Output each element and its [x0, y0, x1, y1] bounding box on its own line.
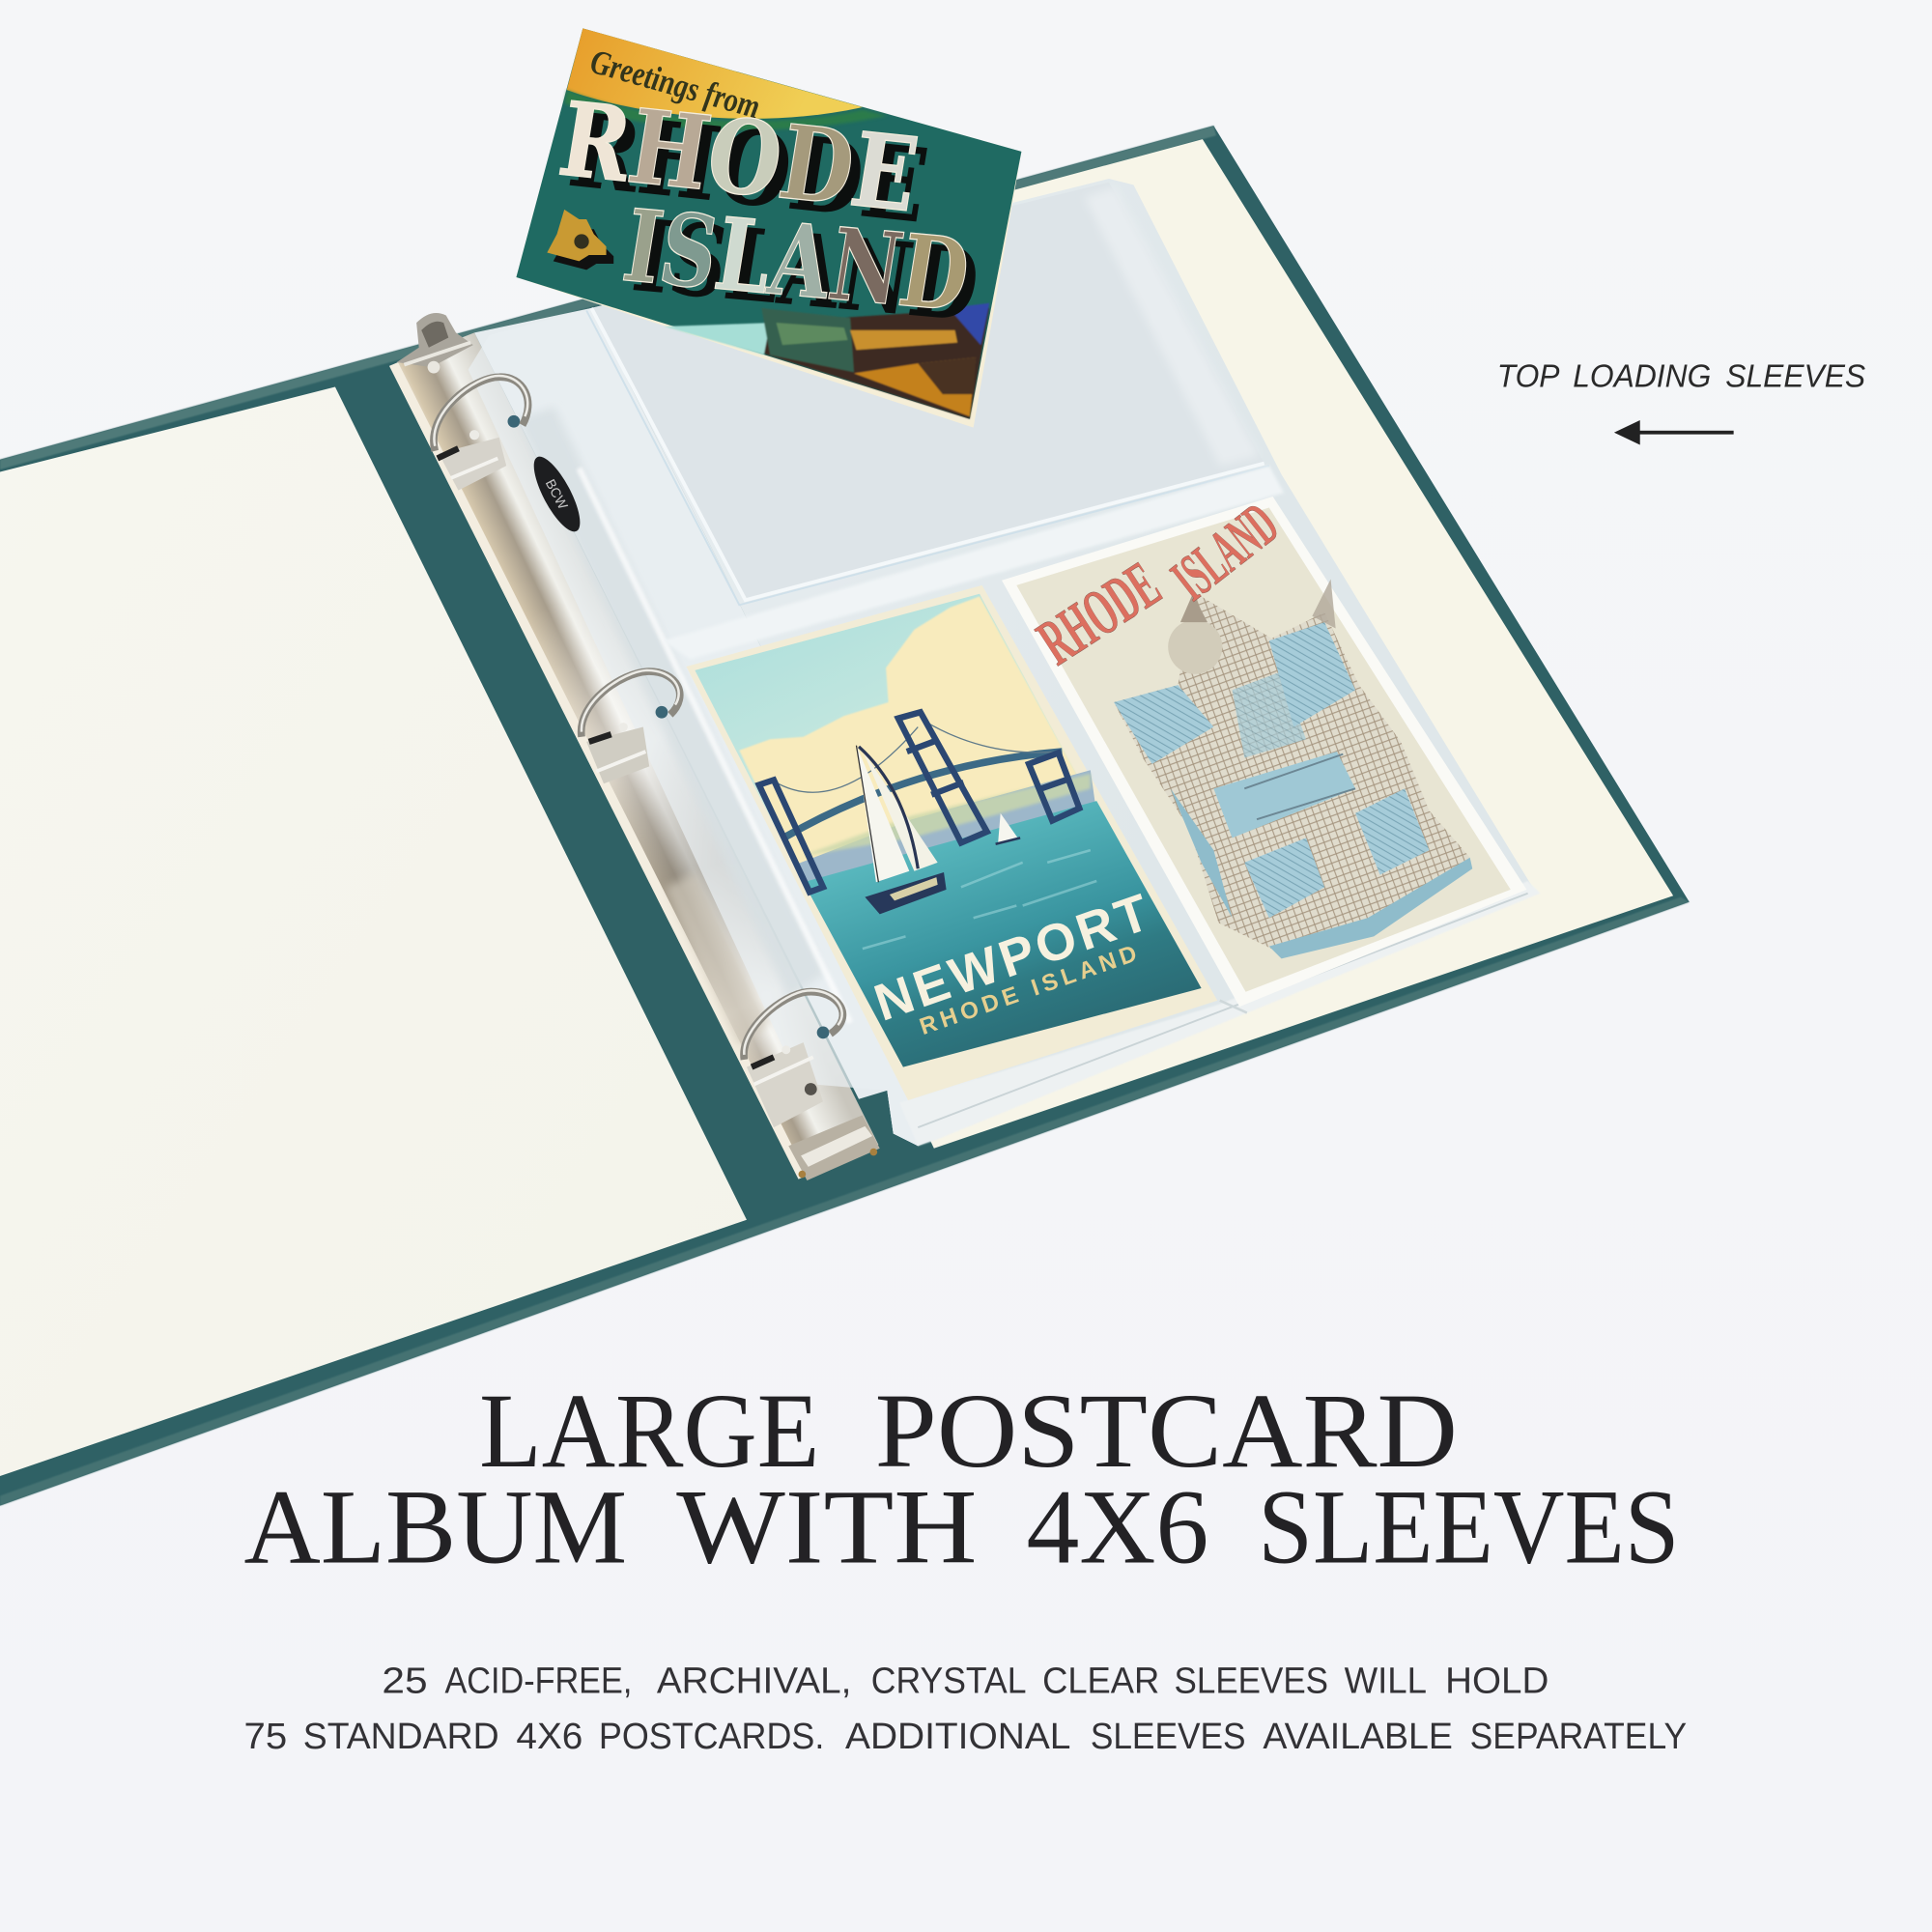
title: SLEEVES	[1258, 1467, 1680, 1585]
description text: 25	[382, 1661, 428, 1702]
city illustration	[1114, 579, 1472, 958]
description text: SLEEVES	[1175, 1661, 1328, 1702]
BCW label	[526, 451, 588, 537]
description text: 75	[244, 1716, 287, 1757]
ring 3	[744, 990, 842, 1127]
binder ring metal bar	[389, 313, 880, 1180]
clouds	[739, 596, 1091, 865]
description text: SLEEVES	[1091, 1716, 1246, 1757]
title: Rhode Island: ISLAND	[1159, 490, 1291, 613]
text: Newport: NEWPORT	[867, 883, 1156, 1033]
left inner page	[0, 387, 747, 1476]
description text: 4X6	[516, 1716, 582, 1757]
street scene	[665, 303, 989, 419]
ring 2	[582, 670, 680, 783]
distant hills	[795, 770, 1096, 894]
description text: AVAILABLE	[1263, 1716, 1453, 1757]
sailboat	[856, 746, 947, 914]
title: WITH	[676, 1467, 977, 1585]
description text: CRYSTAL	[871, 1661, 1026, 1702]
title: ALBUM	[244, 1467, 627, 1585]
postcard: Greetings from Rhode Island	[516, 28, 1021, 428]
water	[804, 801, 1202, 1067]
letters: Rhode: RHODE	[552, 79, 925, 235]
sky	[695, 594, 1091, 865]
binder cover	[0, 126, 1690, 1506]
description text	[244, 1661, 1687, 1757]
description text: WILL	[1345, 1661, 1427, 1702]
bottom clamp	[788, 1115, 880, 1180]
description text: SEPARATELY	[1470, 1716, 1687, 1757]
letters: Island: ISLAND	[616, 187, 977, 334]
greeting text: Greetings from	[587, 42, 763, 127]
title: 4X6	[1026, 1467, 1208, 1585]
description text: STANDARD	[303, 1716, 499, 1757]
plastic sleeve page	[469, 179, 1540, 1146]
description text: CLEAR	[1042, 1661, 1159, 1702]
right inner page	[739, 139, 1673, 1149]
lower stack edge	[899, 881, 1540, 1146]
description text: ADDITIONAL	[845, 1716, 1070, 1757]
hole strip along the rings	[469, 308, 985, 1146]
upper pocket	[586, 183, 1269, 605]
letters: Island: ISLAND	[626, 198, 987, 344]
small sailboat	[996, 813, 1020, 844]
ring 1	[434, 376, 528, 491]
description text: ARCHIVAL,	[657, 1661, 851, 1702]
description text: POSTCARDS.	[599, 1716, 824, 1757]
description text: ACID-FREE,	[444, 1661, 632, 1702]
binder: open album	[0, 126, 1690, 1506]
postcard: Newport Rhode Island	[686, 585, 1217, 1100]
description text: HOLD	[1445, 1661, 1548, 1702]
top clamp	[397, 313, 473, 373]
arrow: pointing left	[1614, 420, 1734, 444]
letters: Rhode: RHODE	[561, 90, 936, 246]
BCW label: BCW	[543, 476, 572, 512]
text: Rhode Island: RHODE ISLAND	[917, 941, 1140, 1040]
yellow sky	[567, 28, 863, 119]
bridge	[759, 712, 1079, 892]
pocket divider	[663, 466, 1284, 659]
binder rings	[434, 376, 842, 1127]
postcard: Rhode Island illustration	[1002, 490, 1526, 1007]
title: LARGE	[479, 1372, 819, 1490]
title: POSTCARD	[875, 1372, 1458, 1490]
title: Rhode Island: RHODE	[1025, 548, 1173, 679]
title	[244, 1372, 1680, 1585]
callout: top loading sleeves: TOP LOADING SLEEVES	[1497, 359, 1865, 395]
state icon	[547, 210, 613, 270]
